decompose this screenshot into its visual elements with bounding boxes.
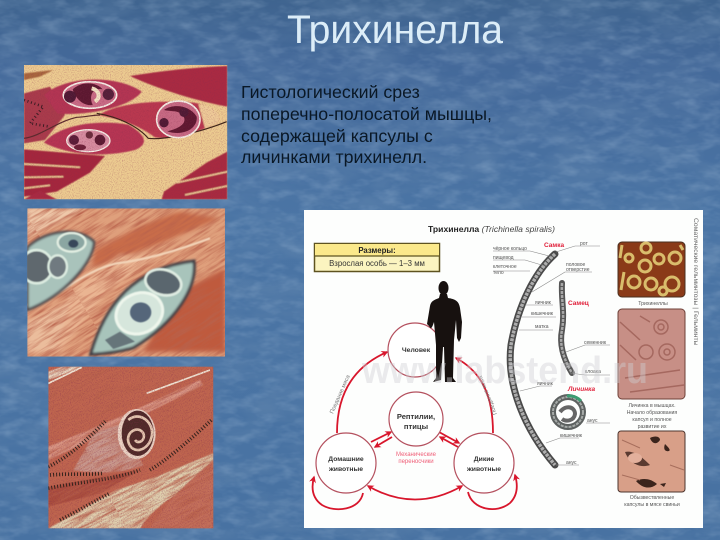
icon: human silhouette — [427, 281, 462, 382]
node: человек — [388, 323, 442, 377]
worm labels and leader lines: половое — [566, 262, 586, 268]
diagram heading: Трихинелла (Trichinella spiralis) — [428, 224, 555, 234]
arrows: transmission cycle — [313, 352, 517, 509]
capsule coils — [63, 82, 117, 108]
text block: description: Гистологический срез — [241, 82, 420, 102]
labels on outer arrows: Поедание мяса — [477, 374, 499, 415]
caption: calcified capsules: Обызвествленные — [630, 495, 674, 501]
caption: calcified capsules: капсулы в мясе свиньи — [624, 502, 680, 508]
node: рептилии, птицы — [389, 392, 443, 446]
illustration: coiled larva — [553, 396, 583, 427]
node: дикие животные: Дикие — [474, 456, 494, 463]
caption: larva in muscle: капсул и полное — [632, 417, 672, 423]
worm labels and leader lines: рот — [580, 241, 588, 247]
worm labels and leader lines: анус — [587, 418, 598, 424]
left capsule — [27, 232, 94, 310]
worm labels and leader lines: чёрное кольцо — [493, 246, 527, 252]
label: mechanical carriers: переносчики — [398, 459, 434, 465]
worm labels and leader lines: семенник — [584, 340, 607, 346]
worm labels and leader lines — [493, 241, 610, 466]
worm labels and leader lines: матка — [535, 324, 549, 330]
worm stage labels: Личинка — [567, 386, 595, 393]
caption: larva in muscle: Личинка в мышцах. — [628, 403, 676, 409]
illustration: adult female worm — [510, 254, 555, 465]
worm stage labels — [544, 242, 595, 393]
worm labels and leader lines: отверстие — [566, 267, 590, 273]
table: sizes: Размеры: — [358, 246, 396, 255]
caption: larva in muscle: Начало образования — [627, 410, 677, 416]
watermark: www.labstend.ru — [361, 350, 648, 392]
node: рептилии, птицы: Рептилии, — [397, 412, 435, 421]
worm labels and leader lines: клеточное — [493, 264, 517, 270]
label: mechanical carriers: Механические — [396, 452, 437, 458]
worm stage labels: Самка — [544, 242, 564, 249]
side label: Соматические гельминтозы | Гельминты — [692, 218, 699, 346]
node: человек: Человек — [402, 347, 431, 354]
text block: description: поперечно-полосатой мышцы, — [241, 104, 492, 124]
labels on outer arrows: Поедание мяса — [329, 374, 352, 415]
worm labels and leader lines: анус — [566, 460, 577, 466]
photo: calcified capsules in pork — [618, 431, 685, 492]
spiral capsule — [118, 409, 156, 459]
worm labels and leader lines: кишечник — [560, 433, 583, 439]
labels on outer arrows — [329, 374, 499, 415]
title: Трихинелла — [287, 8, 504, 52]
worm labels and leader lines: пищевод — [493, 255, 514, 261]
panel: life-cycle diagram — [304, 210, 703, 528]
photo: histological section with three capsules — [24, 65, 227, 199]
worm labels and leader lines: яичник — [535, 300, 552, 306]
worm labels and leader lines: кишечник — [531, 311, 554, 317]
right capsule — [91, 261, 194, 354]
text block: description: содержащей капсулы с — [241, 126, 433, 146]
worm labels and leader lines: тело — [493, 270, 504, 276]
text block: description: личинками трихинелл. — [241, 147, 427, 167]
table: sizes — [314, 244, 440, 272]
worm labels and leader lines: яичник — [537, 381, 554, 387]
node: рептилии, птицы: птицы — [404, 422, 428, 431]
caption: larva in muscle: развитие их — [638, 424, 667, 430]
table: sizes: Взрослая особь — 1–3 мм — [329, 259, 425, 268]
node: домашние животные: Домашние — [328, 456, 364, 463]
photo: isolated larvae — [618, 242, 685, 297]
photo: two elongated capsules in striated muscle — [21, 208, 225, 357]
illustration: adult male worm — [561, 283, 572, 373]
worm stage labels: Самец — [568, 300, 589, 307]
label: mechanical carriers — [396, 452, 437, 465]
node: дикие животные — [454, 433, 514, 493]
caption: calcified capsules — [624, 495, 680, 508]
worm labels and leader lines: клоака — [585, 369, 601, 375]
caption: larvae: Трихинеллы — [638, 301, 668, 307]
caption: larva in muscle — [627, 403, 677, 430]
text block: description — [241, 82, 492, 167]
photo: larva in muscle — [618, 309, 685, 399]
node: домашние животные: животные — [328, 466, 363, 473]
node: домашние животные — [316, 433, 376, 493]
node: дикие животные: животные — [466, 466, 501, 473]
photo: spiral larva in muscle — [48, 367, 213, 528]
